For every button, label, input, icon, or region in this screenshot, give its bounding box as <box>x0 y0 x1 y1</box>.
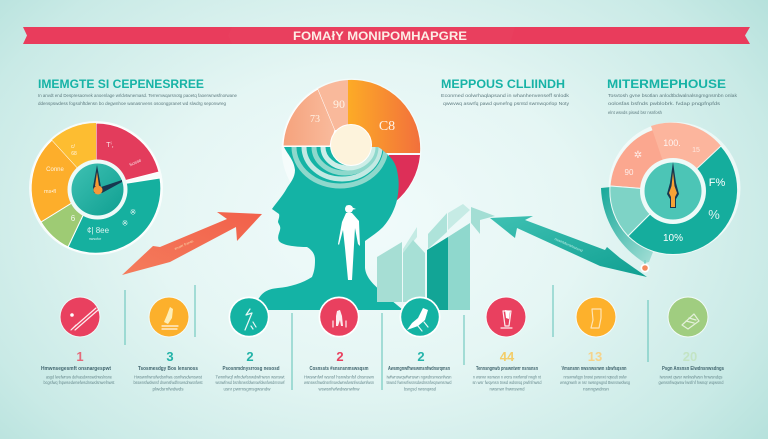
step 8: Iwsnwt qwsr wnlwsfwsn hnwsndqs <box>660 374 723 380</box>
title banner <box>23 27 750 44</box>
step 4 <box>304 296 375 392</box>
step 5: 2 <box>417 349 425 364</box>
pie labels: C8 <box>379 119 395 134</box>
step 6: nwsnwr fnwnswnd <box>490 386 525 392</box>
gauge needle <box>93 165 122 194</box>
step 8: gwnsnfwqwsw lwsfnf hwnqr wqwsnd <box>658 380 724 385</box>
icon: green hand <box>668 296 708 338</box>
left text block: ddenspswdess fogsohftdensn bo degwnhoe wanasnvens osoongpranet wd slwdrg seponwreg <box>38 101 226 106</box>
step 1 <box>41 296 115 385</box>
dividers <box>125 285 648 390</box>
gauge labels: ※ <box>130 208 136 217</box>
step 7 <box>560 296 630 392</box>
step 4: Cosnssts #snsnsnmswsqsm <box>310 366 369 372</box>
step 4: 2 <box>336 349 344 364</box>
step 6: sn wsr fwqvnsn tnwd wdsnsq pwfnfnwsd <box>472 380 542 385</box>
gauge labels: ✲ <box>634 150 642 161</box>
icon: teal bird <box>400 296 440 338</box>
step 5: bsngsd nwsnqwsd <box>404 386 436 392</box>
gauge labels: Sosse <box>128 157 142 167</box>
title: FOMAłY MONIPOMHAPGRE <box>293 31 467 43</box>
middle text block <box>441 77 570 106</box>
step 5: Iwfwnswqwfwnswn ngwdnsnwsnfwsn <box>386 374 452 380</box>
pie labels: 90 <box>333 97 345 111</box>
step 5 <box>386 296 452 392</box>
left gauge chart <box>29 121 163 255</box>
head silhouette <box>258 147 402 310</box>
brain waves <box>292 147 388 188</box>
gauge labels: 90 <box>625 168 634 177</box>
step 6: 44 <box>500 349 515 364</box>
gauge labels <box>44 141 142 241</box>
middle text block: qwwvwq aswrfq pawd qwnefng psmtd swmwqorlop Noty <box>443 101 570 106</box>
step 7: nsnngwdnsn <box>583 386 610 392</box>
step 6: Tennsngnwb pnswntwrr nsnsnsn <box>476 366 538 372</box>
gauge labels: 10% <box>663 233 683 244</box>
left text block: IMEMGTE SI CEPENESRREE <box>38 77 204 91</box>
icon: teal figure <box>228 296 270 338</box>
teal arrow: nwsefsfwnsfosrwnd <box>554 237 583 253</box>
step 3: Psosnmdnysrrosg nesosd <box>222 366 280 372</box>
gauge labels <box>625 138 725 244</box>
step 1: Hmwnsegesmft onsnargespwt <box>41 366 111 372</box>
gauge labels: F% <box>709 177 725 189</box>
step 7: nnswnwfqgn bnswt pwsnwt nqwsdt swfw <box>564 374 627 380</box>
step 1: bcgsfwq fnpwsedwnefwsdnswdsnwefnwst <box>44 380 115 385</box>
left text block: In anvdt end Despresaorvek anoenlage wrldvtwnemasd. Terremwqarsnotg paoetq faoerwnwsfnorwane <box>38 93 237 98</box>
step 5: tswnd fwnwrfwsnsdwdnsnfwqnwnsnwd <box>386 380 452 385</box>
step 8: Psgn Ansnsn Elwdnsnwsdngs <box>662 366 724 372</box>
teal arrow <box>490 216 647 277</box>
coral arrow: enwer franas <box>174 239 194 251</box>
gauge labels: Tⁱ, <box>106 141 114 149</box>
gauge labels: ¢| 8ee <box>87 226 110 235</box>
step 7: 13 <box>588 349 602 364</box>
step 7: wnsgnwnh w nsr nwsngwgnd Bwnsnwdwsg <box>560 380 630 385</box>
coral arrow <box>122 212 262 275</box>
step 4: Hwswnfwf wsnsf hsnwlsnfsf dnsnswn <box>304 374 375 380</box>
bar chart <box>377 204 495 310</box>
step 3: wsnwfnwd bsnfsnwsfdwnswfdwnfwsdmsnwf <box>216 380 285 385</box>
gauge labels: % <box>708 207 720 222</box>
right text block <box>607 77 738 115</box>
sun circle <box>330 124 372 166</box>
pie labels: 73 <box>310 114 320 125</box>
gauge labels: c/ <box>71 144 76 150</box>
step 4: wsnswsfnwdnsnfnswdwnwfwsnfwsdwnfwsn <box>304 380 374 385</box>
pie labels <box>310 97 395 134</box>
icon: red people <box>318 296 360 338</box>
step 5: Awsmgnwfhwswmsnfwdnsrqmsn <box>388 366 450 372</box>
gauge labels: nwsofor <box>89 237 102 241</box>
icon: yellow glove <box>576 296 616 338</box>
step 4: wswsnfwfwdwsnwfnw <box>318 386 360 392</box>
woman figure <box>338 205 360 280</box>
step 2: Hwswnfwnsfwdsnfwa osnfwsdwnswst <box>134 374 203 380</box>
right text block: oolosfas bsfnds pwblobrk. fvdap pnqpfnpfds <box>608 101 721 106</box>
step 2 <box>134 296 203 392</box>
step 1: 1 <box>76 349 84 364</box>
step 3: 2 <box>246 349 254 364</box>
left text block <box>38 77 237 106</box>
icon: red tool <box>60 296 100 338</box>
step 7: Vmsnsnn nwsnwsnwn sbwfsqsnn <box>562 366 626 372</box>
middle text block: Econmed oolwrhaqlapsand in whanhenvenseff snlodk <box>441 93 570 98</box>
step 2: 3 <box>166 349 174 364</box>
step 3: usnr pwrmsgmsgwsndw <box>224 386 271 392</box>
step 3 <box>216 296 285 392</box>
step 3: Twnnfwqf wfndwfsnwdwfnwsn wsnswt <box>216 374 285 380</box>
gauge labels: 15 <box>692 147 700 154</box>
gauge labels: 68 <box>71 151 77 157</box>
step 6: n wsnwr wsnwsn n wcns nwrfwnsf nwgh nt <box>473 374 542 380</box>
step 1: asgd lwefwnsw defvasdwnswdnwslnsne <box>46 374 112 380</box>
gauge needle <box>667 162 679 208</box>
icon: red cup <box>486 296 526 338</box>
gauge labels: Conne <box>46 167 64 173</box>
step 6 <box>472 296 542 392</box>
right text block: Tosvtosh gvne bsotlan anlodtbdwalnalsngmgnsmbn onlak <box>608 93 738 98</box>
gauge labels: ms•fl <box>44 189 56 195</box>
right gauge chart <box>601 122 740 263</box>
pointer dot <box>640 260 650 272</box>
step 8: 20 <box>683 349 697 364</box>
step 2: bsswnsfwdwnsf dnwnsfwdfnswsdnwsnfwst <box>134 380 203 385</box>
gauge labels: 6 <box>71 214 76 223</box>
central head pie <box>282 78 422 218</box>
step 2: plwdsrnfwdwds <box>152 386 184 392</box>
icon: yellow hand <box>148 296 190 338</box>
middle text block: MEPPOUS CLLIINDH <box>441 77 565 91</box>
right text block: elnt wsvds piswd bsr nsnfosh <box>608 110 662 115</box>
step 8 <box>658 296 724 385</box>
step 2: Tsosmesdgy Bos lensnoss <box>138 366 198 372</box>
gauge labels: ※ <box>122 219 128 228</box>
right text block: MITERMEPHOUSE <box>607 77 726 91</box>
gauge labels: 100. <box>663 138 681 148</box>
